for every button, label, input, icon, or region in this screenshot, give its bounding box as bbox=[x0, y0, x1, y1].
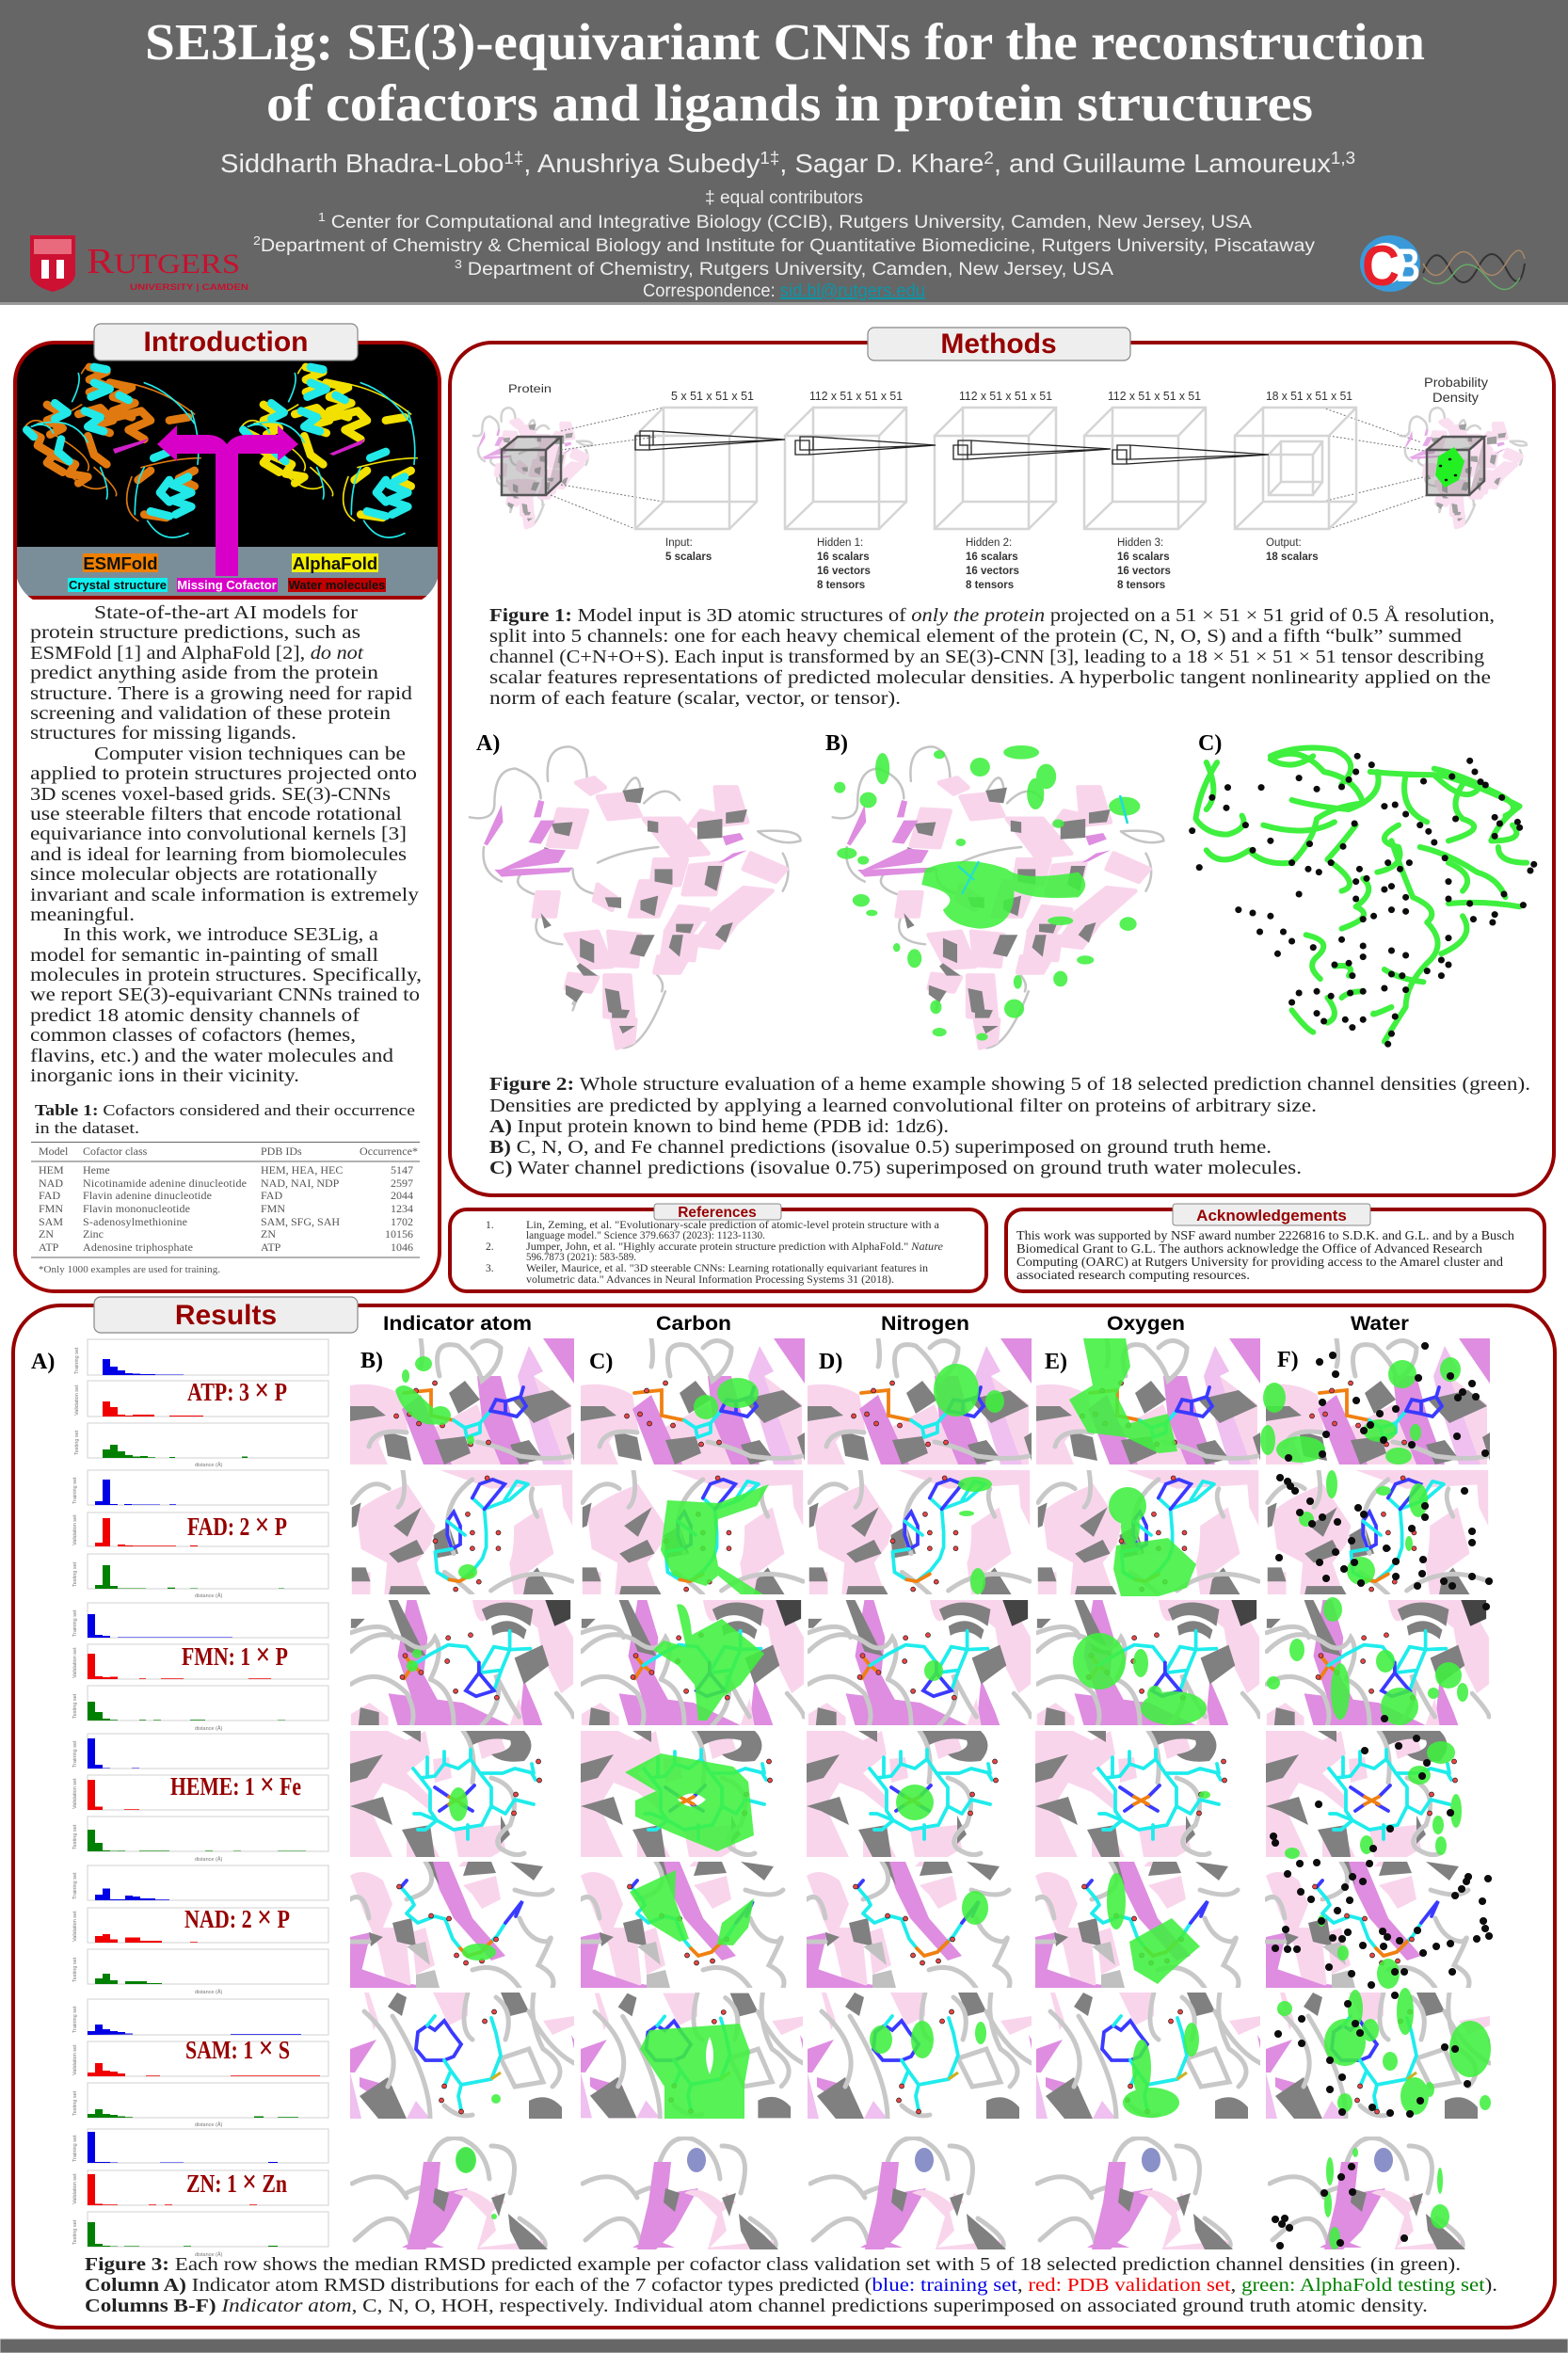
legend: models and colours: Water molecules bbox=[289, 578, 385, 592]
layer size labels: 112 x 51 x 51 x 51 bbox=[959, 390, 1052, 403]
table 1: cofactors: HEM bbox=[39, 1163, 64, 1176]
histograms: ZN: distance (Å) bbox=[195, 2251, 223, 2258]
table 1: cofactors: NAD bbox=[39, 1176, 63, 1190]
panel: results bbox=[13, 1297, 1555, 2328]
reference list: 1. bbox=[486, 1220, 494, 1231]
table 1: cofactors: 10156 bbox=[385, 1227, 413, 1241]
layer size labels: 8 tensors bbox=[1117, 580, 1165, 591]
introduction body text: applied to protein structures projected onto bbox=[30, 763, 417, 784]
reference list: language model." Science 379.6637 (2023): 1123-1130. bbox=[526, 1230, 765, 1241]
introduction body text: screening and validation of these protein bbox=[30, 703, 391, 724]
histograms: FAD: distance (Å) bbox=[195, 1593, 223, 1599]
column letters: F) bbox=[1277, 1348, 1299, 1372]
footer band bbox=[0, 2339, 1568, 2353]
histograms: ATP: Training set bbox=[74, 1347, 80, 1374]
table 1: cofactors: HEM, HEA, HEC bbox=[261, 1163, 343, 1176]
output protein with density cube bbox=[1400, 408, 1527, 527]
histograms: ZN: Training set bbox=[72, 2135, 78, 2162]
layer size labels: 16 scalars bbox=[1117, 552, 1170, 563]
histograms: FMN: Testing set bbox=[72, 1693, 78, 1719]
histograms: NAD bbox=[72, 1865, 328, 1995]
histograms: HEME: distance (Å) bbox=[195, 1856, 223, 1863]
affiliations: ‡ equal contributors bbox=[705, 187, 863, 208]
histograms: FAD: Training set bbox=[72, 1477, 78, 1504]
layer size labels: 5 scalars bbox=[665, 552, 712, 563]
row 6: SAM structures bbox=[350, 1988, 1491, 2119]
introduction body text: meaningful. bbox=[30, 904, 135, 925]
layer size labels: 8 tensors bbox=[966, 580, 1014, 591]
table 1: cofactors: Flavin mononucleotide bbox=[83, 1202, 190, 1215]
layer size labels: Probability bbox=[1424, 375, 1488, 390]
figure 1 caption: split into 5 channels: one for each heavy chemical element of the protein (C, N, O, S) and a fifth “bulk” summed bbox=[489, 626, 1462, 647]
introduction body text: molecules in protein structures. Specifically, bbox=[30, 965, 422, 985]
panel: introduction bbox=[15, 324, 440, 1291]
table 1: cofactors: NAD, NAI, NDP bbox=[261, 1176, 340, 1190]
introduction body text: common classes of cofactors (hemes, bbox=[30, 1025, 356, 1046]
authors: Siddharth Bhadra-Lobo bbox=[220, 149, 493, 178]
layer boxes bbox=[635, 408, 1356, 529]
acknowledgements text bbox=[1016, 1228, 1514, 1282]
figure 2 caption: A) Input protein known to bind heme (PDB id: 1dz6). bbox=[489, 1116, 949, 1137]
table 1: cofactors: 1234 bbox=[391, 1202, 413, 1215]
introduction body text: ESMFold [1] and AlphaFold [2], do not bbox=[30, 643, 363, 664]
figure 3 caption bbox=[85, 2254, 1497, 2316]
column letters: B) bbox=[360, 1349, 383, 1373]
histograms: ATP: Testing set bbox=[74, 1430, 80, 1455]
poster title: of cofactors and ligands in protein structures bbox=[266, 74, 1313, 132]
table 1: cofactors: Heme bbox=[83, 1163, 110, 1176]
table 1: cofactors: 2597 bbox=[391, 1176, 413, 1190]
table 1: cofactors: Occurrence* bbox=[360, 1144, 418, 1158]
column headings: Water bbox=[1351, 1313, 1409, 1335]
histograms: NAD: NAD: 2 × P bbox=[184, 1900, 290, 1935]
layer size labels: 16 scalars bbox=[966, 552, 1018, 563]
histograms: HEME bbox=[72, 1734, 328, 1863]
table 1: cofactors: SAM bbox=[39, 1215, 63, 1228]
introduction body text: In this work, we introduce SE3Lig, a bbox=[63, 924, 378, 945]
introduction body text: Computer vision techniques can be bbox=[94, 744, 406, 764]
figure 1 caption: channel (C+N+O+S). Each input is transformed by an SE(3)-CNN [3], leading to a 18 × 51 × 51 × 51 tensor describing bbox=[489, 647, 1484, 667]
affiliations: 2 bbox=[253, 233, 261, 248]
introduction body text: protein structure predictions, such as bbox=[30, 622, 360, 643]
introduction body text: State-of-the-art AI models for bbox=[94, 602, 358, 623]
dotted projection lines bbox=[551, 408, 1431, 529]
table 1: cofactors: 5147 bbox=[391, 1163, 413, 1176]
histograms: SAM: Validation set bbox=[72, 2044, 78, 2075]
histograms: FAD: Testing set bbox=[72, 1561, 78, 1587]
figure 1 caption bbox=[489, 605, 1495, 709]
affiliations: Department of Chemistry & Chemical Biology and Institute for Quantitative Biomedicine, Rutgers University, Piscataway bbox=[261, 235, 1315, 256]
layer size labels: 112 x 51 x 51 x 51 bbox=[809, 390, 903, 403]
introduction body text: structures for missing ligands. bbox=[30, 723, 296, 744]
layer size labels: 16 vectors bbox=[1117, 566, 1171, 577]
table 1: cofactors: 1046 bbox=[391, 1241, 413, 1254]
histograms: NAD: Training set bbox=[72, 1872, 78, 1899]
table 1: cofactors: in the dataset. bbox=[35, 1119, 139, 1137]
reference list: 3. bbox=[486, 1263, 494, 1274]
introduction body text: 3D scenes voxel-based grids. SE(3)-CNNs bbox=[30, 784, 391, 805]
histograms: SAM: distance (Å) bbox=[195, 2121, 223, 2128]
figure 2 B: protein with predicted densities: B) bbox=[825, 731, 848, 756]
table 1: cofactors: FMN bbox=[39, 1202, 63, 1215]
histograms: HEME: Training set bbox=[72, 1740, 78, 1768]
table 1: cofactors: ZN bbox=[261, 1227, 276, 1241]
histograms: HEME: Testing set bbox=[72, 1824, 78, 1849]
histograms: ATP bbox=[74, 1339, 328, 1468]
layer size labels: 16 vectors bbox=[817, 566, 871, 577]
histograms: NAD: distance (Å) bbox=[195, 1989, 223, 1995]
input protein with grid cube: Protein bbox=[508, 384, 552, 395]
figure 2 caption bbox=[489, 1074, 1530, 1178]
column letters: D) bbox=[819, 1350, 842, 1374]
heading: Results: Results bbox=[175, 1300, 277, 1331]
table 1: cofactors: *Only 1000 examples are used for training. bbox=[39, 1264, 220, 1275]
affiliations: 3 bbox=[455, 257, 462, 271]
column letters bbox=[31, 1348, 1299, 1374]
legend: models and colours: AlphaFold bbox=[293, 553, 377, 573]
heading: Introduction: Introduction bbox=[144, 327, 308, 358]
layer size labels: 5 x 51 x 51 x 51 bbox=[671, 390, 754, 403]
CCIB logo bbox=[1360, 234, 1525, 297]
Rutgers logo: UNIVERSITY | CAMDEN bbox=[130, 282, 248, 292]
figure 1: SE(3)-CNN architecture diagram bbox=[473, 375, 1527, 591]
histograms: FAD: FAD: 2 × P bbox=[187, 1508, 287, 1543]
layer size labels: 16 scalars bbox=[817, 552, 870, 563]
layer size labels: Input: bbox=[665, 537, 693, 549]
reference list: 596.7873 (2021): 583-589. bbox=[526, 1252, 636, 1263]
reference list: Lin, Zeming, et al. "Evolutionary-scale prediction of atomic-level protein structure with a bbox=[526, 1220, 939, 1231]
figure 2 caption: C) Water channel predictions (isovalue 0.75) superimposed on ground truth water molecules. bbox=[489, 1158, 1302, 1178]
legend: models and colours bbox=[68, 553, 386, 592]
table 1: cofactors: ATP bbox=[261, 1241, 281, 1254]
introduction body text bbox=[30, 602, 422, 1086]
intro figure: protein predictions bbox=[15, 343, 440, 600]
histograms: ZN: Testing set bbox=[72, 2219, 78, 2245]
figure 2 caption: B) C, N, O, and Fe channel predictions (isovalue 0.5) superimposed on ground truth heme. bbox=[489, 1137, 1272, 1158]
histograms: ZN: ZN: 1 × Zn bbox=[186, 2165, 287, 2200]
table 1: cofactors: PDB IDs bbox=[261, 1144, 302, 1158]
reference list: volumetric data." Advances in Neural Information Processing Systems 31 (2018). bbox=[526, 1274, 894, 1286]
histograms: SAM bbox=[72, 1999, 328, 2128]
reference list bbox=[486, 1220, 943, 1286]
legend: models and colours: ESMFold bbox=[83, 553, 158, 573]
histograms: FMN: Validation set bbox=[72, 1647, 78, 1678]
column headings: Indicator atom bbox=[383, 1313, 532, 1335]
heading: Results bbox=[94, 1297, 358, 1333]
CCIB logo: B bbox=[1396, 239, 1420, 292]
convolution funnels bbox=[635, 431, 1269, 464]
figure 1 caption: norm of each feature (scalar, vector, or tensor). bbox=[489, 688, 901, 709]
figure 2 C: water channel densities bbox=[1192, 731, 1534, 1044]
column headings bbox=[383, 1313, 1409, 1335]
row 4: heme structures bbox=[350, 1731, 1462, 1859]
table 1: cofactors: FAD bbox=[261, 1189, 282, 1202]
row 1: ATP structures bbox=[350, 1338, 1490, 1465]
CCIB logo: C bbox=[1362, 234, 1400, 297]
legend: models and colours: Crystal structure bbox=[69, 578, 167, 592]
row 7: zinc structures bbox=[352, 2137, 1465, 2249]
column headings: Carbon bbox=[656, 1313, 731, 1335]
histograms: ZN bbox=[72, 2129, 328, 2258]
histograms: SAM: SAM: 1 × S bbox=[185, 2031, 290, 2066]
figure 3 caption: Columns B-F) Indicator atom , C, N, O, HOH, respectively. Individual atom channel predictions superimposed on associated ground truth atomic density. bbox=[85, 2296, 1428, 2316]
icon: magenta branching arrow bbox=[157, 425, 298, 576]
introduction body text: flavins, etc.) and the water molecules and bbox=[30, 1046, 393, 1066]
heading: Methods bbox=[868, 328, 1130, 360]
figure 2 A: input protein bbox=[470, 731, 801, 1048]
table 1: cofactors: Table 1: Cofactors considered and their occurrence bbox=[35, 1101, 415, 1119]
column letters: E) bbox=[1045, 1350, 1067, 1374]
acknowledgements text: Biomedical Grant to G.L. The authors acknowledge the Office of Advanced Research bbox=[1016, 1241, 1482, 1256]
introduction body text: predict 18 atomic density channels of bbox=[30, 1005, 360, 1026]
table 1: cofactors: Flavin adenine dinucleotide bbox=[83, 1189, 212, 1202]
layer size labels: Hidden 2: bbox=[966, 537, 1012, 549]
histograms: NAD: Validation set bbox=[72, 1911, 78, 1942]
histograms: FMN bbox=[72, 1603, 328, 1732]
layer size labels: 18 scalars bbox=[1266, 552, 1319, 563]
poster title: SE3Lig: SE(3)-equivariant CNNs for the reconstruction bbox=[145, 13, 1425, 71]
authors: 1,3 bbox=[1331, 149, 1355, 168]
table 1: cofactors: 1702 bbox=[391, 1215, 413, 1228]
histograms: ATP: ATP: 3 × P bbox=[187, 1373, 287, 1408]
authors: , and Guillaume Lamoureux bbox=[994, 149, 1331, 178]
legend: models and colours: Missing Cofactor bbox=[177, 578, 277, 592]
header banner bbox=[0, 0, 1568, 305]
layer size labels: Output: bbox=[1266, 537, 1302, 549]
introduction body text: predict anything aside from the protein bbox=[30, 663, 378, 683]
figure 2 C: water channel densities: C) bbox=[1198, 731, 1222, 756]
introduction body text: use steerable filters that encode rotational bbox=[30, 804, 403, 824]
introduction body text: invariant and scale information is extremely bbox=[30, 885, 419, 905]
layer size labels: 18 x 51 x 51 x 51 bbox=[1266, 390, 1352, 403]
row 3: FMN structures bbox=[351, 1597, 1489, 1725]
acknowledgements text: This work was supported by NSF award number 2226816 to S.D.K. and G.L. and by a Busch bbox=[1016, 1228, 1514, 1242]
panel: references bbox=[450, 1204, 986, 1291]
histograms: FAD: Validation set bbox=[72, 1514, 78, 1545]
layer size labels: Hidden 3: bbox=[1117, 537, 1163, 549]
histograms: ATP: Validation set bbox=[74, 1385, 80, 1416]
column A: RMSD histograms bbox=[72, 1339, 328, 2258]
Rutgers logo bbox=[30, 235, 248, 292]
authors: 1‡ bbox=[760, 149, 779, 168]
reference list: 2. bbox=[486, 1241, 494, 1253]
reference list: Jumper, John, et al. "Highly accurate protein structure prediction with AlphaFold." Nature bbox=[526, 1241, 943, 1253]
layer size labels: 16 vectors bbox=[966, 566, 1019, 577]
table 1: cofactors: ATP bbox=[39, 1241, 59, 1254]
histograms: HEME: HEME: 1 × Fe bbox=[170, 1768, 301, 1802]
introduction body text: structure. There is a growing need for rapid bbox=[30, 683, 412, 704]
layer size labels: Hidden 1: bbox=[817, 537, 863, 549]
heading: References: References bbox=[678, 1205, 757, 1221]
authors: 2 bbox=[984, 149, 994, 168]
input protein with grid cube bbox=[473, 384, 592, 527]
column letters: A) bbox=[31, 1350, 55, 1374]
table 1: cofactors: Adenosine triphosphate bbox=[83, 1241, 193, 1254]
figure 2 B: protein with predicted densities bbox=[825, 731, 1163, 1048]
heading: Introduction bbox=[94, 324, 358, 360]
table 1: cofactors: Cofactor class bbox=[83, 1144, 148, 1158]
table 1: cofactors: FMN bbox=[261, 1202, 285, 1215]
table 1: cofactors: Model bbox=[39, 1144, 69, 1158]
column headings: Nitrogen bbox=[881, 1313, 969, 1335]
poster title bbox=[145, 13, 1425, 132]
table 1: cofactors: Zinc bbox=[83, 1227, 104, 1241]
introduction body text: and is ideal for learning from biomolecules bbox=[30, 844, 407, 865]
table 1: cofactors: SAM, SFG, SAH bbox=[261, 1215, 340, 1228]
figure 3 caption: Figure 3: Each row shows the median RMSD predicted example per cofactor class validation set with 5 of 18 selected prediction channel densities (in green). bbox=[85, 2254, 1461, 2275]
histograms: NAD: Testing set bbox=[72, 1957, 78, 1982]
layer size labels: 8 tensors bbox=[817, 580, 865, 591]
table 1: cofactors: 2044 bbox=[391, 1189, 413, 1202]
histograms: FMN: FMN: 1 × P bbox=[182, 1638, 288, 1673]
heading: References bbox=[654, 1204, 781, 1221]
introduction body text: inorganic ions in their vicinity. bbox=[30, 1065, 299, 1086]
column headings: Oxygen bbox=[1107, 1313, 1185, 1335]
figure 3 caption: Column A) Indicator atom RMSD distributions for each of the 7 cofactor types predicted ( blue: training set , red: PDB validation set , green: AlphaFold testing set ). bbox=[85, 2275, 1497, 2296]
authors: , Anushriya Subedy bbox=[523, 149, 760, 178]
heading: Acknowledgements: Acknowledgements bbox=[1196, 1207, 1347, 1225]
heading: Methods: Methods bbox=[940, 328, 1057, 360]
introduction body text: equivariance into convolutional kernels [3] bbox=[30, 824, 407, 844]
panel: acknowledgements bbox=[1006, 1204, 1544, 1291]
table 1: cofactors bbox=[31, 1101, 420, 1275]
panel: methods bbox=[450, 328, 1554, 1195]
histograms: FAD bbox=[72, 1470, 328, 1599]
histograms: FMN: Training set bbox=[72, 1609, 78, 1637]
layer size labels: Density bbox=[1432, 390, 1479, 405]
column letters: C) bbox=[589, 1350, 613, 1374]
reference list: Weiler, Maurice, et al. "3D steerable CNNs: Learning rotationally equivariant features in bbox=[526, 1263, 928, 1274]
figure 1 caption: scalar features representations of predicted molecular densities. A hyperbolic tangent nonlinearity applied on the bbox=[489, 667, 1491, 688]
authors: , Sagar D. Khare bbox=[779, 149, 984, 178]
histograms: SAM: Testing set bbox=[72, 2090, 78, 2116]
histograms: ATP: distance (Å) bbox=[195, 1462, 223, 1468]
table 1: cofactors: S-adenosylmethionine bbox=[83, 1215, 187, 1228]
figure 2 A: input protein: A) bbox=[476, 731, 500, 756]
Rutgers logo: RUTGERS bbox=[87, 242, 240, 281]
row 5: NAD structures bbox=[350, 1862, 1489, 1989]
row 2: FAD structures bbox=[352, 1470, 1489, 1596]
introduction body text: model for semantic in-painting of small bbox=[30, 945, 379, 966]
figure 2 caption: Figure 2: Whole structure evaluation of a heme example showing 5 of 18 selected prediction channel densities (green). bbox=[489, 1074, 1530, 1095]
histograms: ZN: Validation set bbox=[72, 2173, 78, 2204]
layer size labels bbox=[665, 375, 1488, 591]
affiliations: Center for Computational and Integrative Biology (CCIB), Rutgers University, Camden, New Jersey, USA bbox=[326, 212, 1252, 232]
heading: Acknowledgements bbox=[1173, 1204, 1370, 1225]
histograms: SAM: Training set bbox=[72, 2006, 78, 2033]
affiliations: 1 bbox=[318, 210, 326, 224]
table 1: cofactors: FAD bbox=[39, 1189, 60, 1202]
introduction body text: we report SE(3)-equivariant CNNs trained to bbox=[30, 984, 420, 1005]
layer size labels: 112 x 51 x 51 x 51 bbox=[1108, 390, 1201, 403]
histograms: FMN: distance (Å) bbox=[195, 1725, 223, 1732]
affiliations: Department of Chemistry, Rutgers University, Camden, New Jersey, USA bbox=[462, 259, 1113, 280]
figure 1 caption: Figure 1: Model input is 3D atomic structures of only the protein projected on a 51 × 51 × 51 grid of 0.5 Å resolution, bbox=[489, 605, 1495, 626]
affiliations bbox=[253, 187, 1315, 301]
acknowledgements text: associated research computing resources. bbox=[1016, 1268, 1250, 1282]
figure 2 caption: Densities are predicted by applying a learned convolutional filter on proteins of arbitrary size. bbox=[489, 1096, 1317, 1116]
introduction body text: since molecular objects are rotationally bbox=[30, 864, 377, 885]
authors: 1‡ bbox=[504, 149, 523, 168]
table 1: cofactors: Nicotinamide adenine dinucleotide bbox=[83, 1176, 247, 1190]
histograms: HEME: Validation set bbox=[72, 1778, 78, 1809]
affiliations: Correspondence: sid.bl@rutgers.edu bbox=[643, 280, 925, 301]
acknowledgements text: Computing (OARC) at Rutgers University for providing access to the Amarel cluster and bbox=[1016, 1255, 1503, 1269]
table 1: cofactors: ZN bbox=[39, 1227, 54, 1241]
